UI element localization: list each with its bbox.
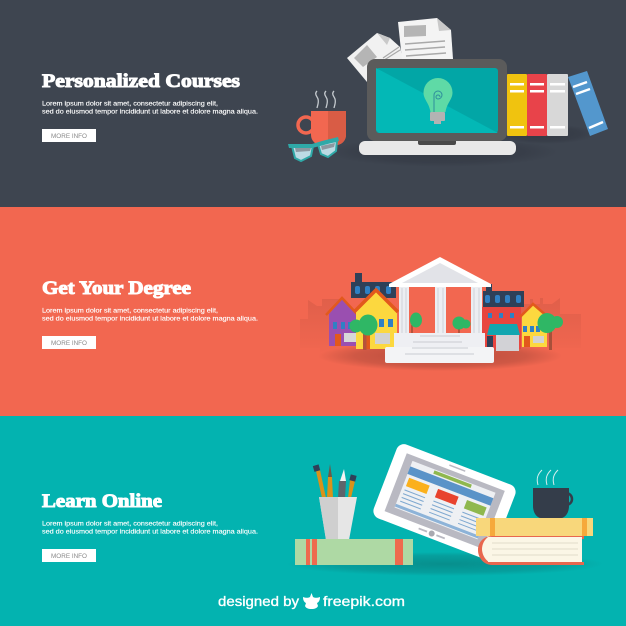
illustration: online study desk <box>287 442 603 576</box>
text block: courses description: Lorem ipsum dolor sit amet, consectetur adipiscing elit, <box>42 100 218 108</box>
building: purple house <box>326 298 358 346</box>
footer: freepik credit: freepik.com <box>323 593 405 609</box>
icon: books <box>507 71 608 136</box>
panel: learn online <box>0 416 626 626</box>
icon: pencil cup <box>313 464 357 540</box>
icon: temple <box>385 257 494 363</box>
building: small yellow house <box>520 304 548 347</box>
building: yellow house <box>354 290 398 349</box>
button: more info: MORE INFO <box>51 553 87 560</box>
footer: freepik credit <box>218 593 405 609</box>
icon: freepik logo <box>303 593 320 609</box>
illustration: laptop desk <box>288 18 608 167</box>
icon: papers <box>347 18 453 82</box>
text block: degree description: Lorem ipsum dolor sit amet, consectetur adipiscing elit, <box>42 308 218 314</box>
button: more info <box>42 129 96 142</box>
building: teal awning shop <box>487 324 520 351</box>
icon: black mug <box>533 470 572 518</box>
text block: online description: sed do eiusmod tempor incididunt ut labore et dolore magna aliqua. <box>42 528 258 536</box>
text block: degree description <box>42 308 258 322</box>
panel: personalized courses <box>0 0 626 207</box>
icon: coffee cup <box>298 91 346 145</box>
building: dark navy houses <box>351 273 524 349</box>
icon: stacked books <box>476 518 593 565</box>
icon: glasses <box>288 137 339 161</box>
text block: online description <box>42 520 258 536</box>
icon: light bulb <box>424 78 452 124</box>
text block: degree description: sed do eiusmod tempor incididunt ut labore et dolore magna aliqua. <box>42 316 258 322</box>
text block: courses description: sed do eiusmod tempor incididunt ut labore et dolore magna aliqua. <box>42 108 258 116</box>
button: more info: MORE INFO <box>51 133 87 140</box>
illustration: campus town <box>300 257 581 371</box>
skyline silhouette <box>300 298 581 356</box>
icon: tablet <box>371 442 518 561</box>
text block: courses description <box>42 100 258 116</box>
button: more info <box>42 336 96 349</box>
trees <box>350 312 563 350</box>
button: more info <box>42 549 96 562</box>
panel: get your degree <box>0 207 626 416</box>
text block: online description: Lorem ipsum dolor sit amet, consectetur adipiscing elit, <box>42 520 218 528</box>
button: more info: MORE INFO <box>51 340 87 347</box>
heading: learn online: Learn Online <box>42 491 162 512</box>
heading: get your degree: Get Your Degree <box>42 278 191 299</box>
icon: laptop <box>359 59 516 155</box>
footer: freepik credit: designed by <box>218 593 299 609</box>
heading: personalized courses: Personalized Courses <box>42 71 240 92</box>
icon: green book <box>295 539 413 565</box>
